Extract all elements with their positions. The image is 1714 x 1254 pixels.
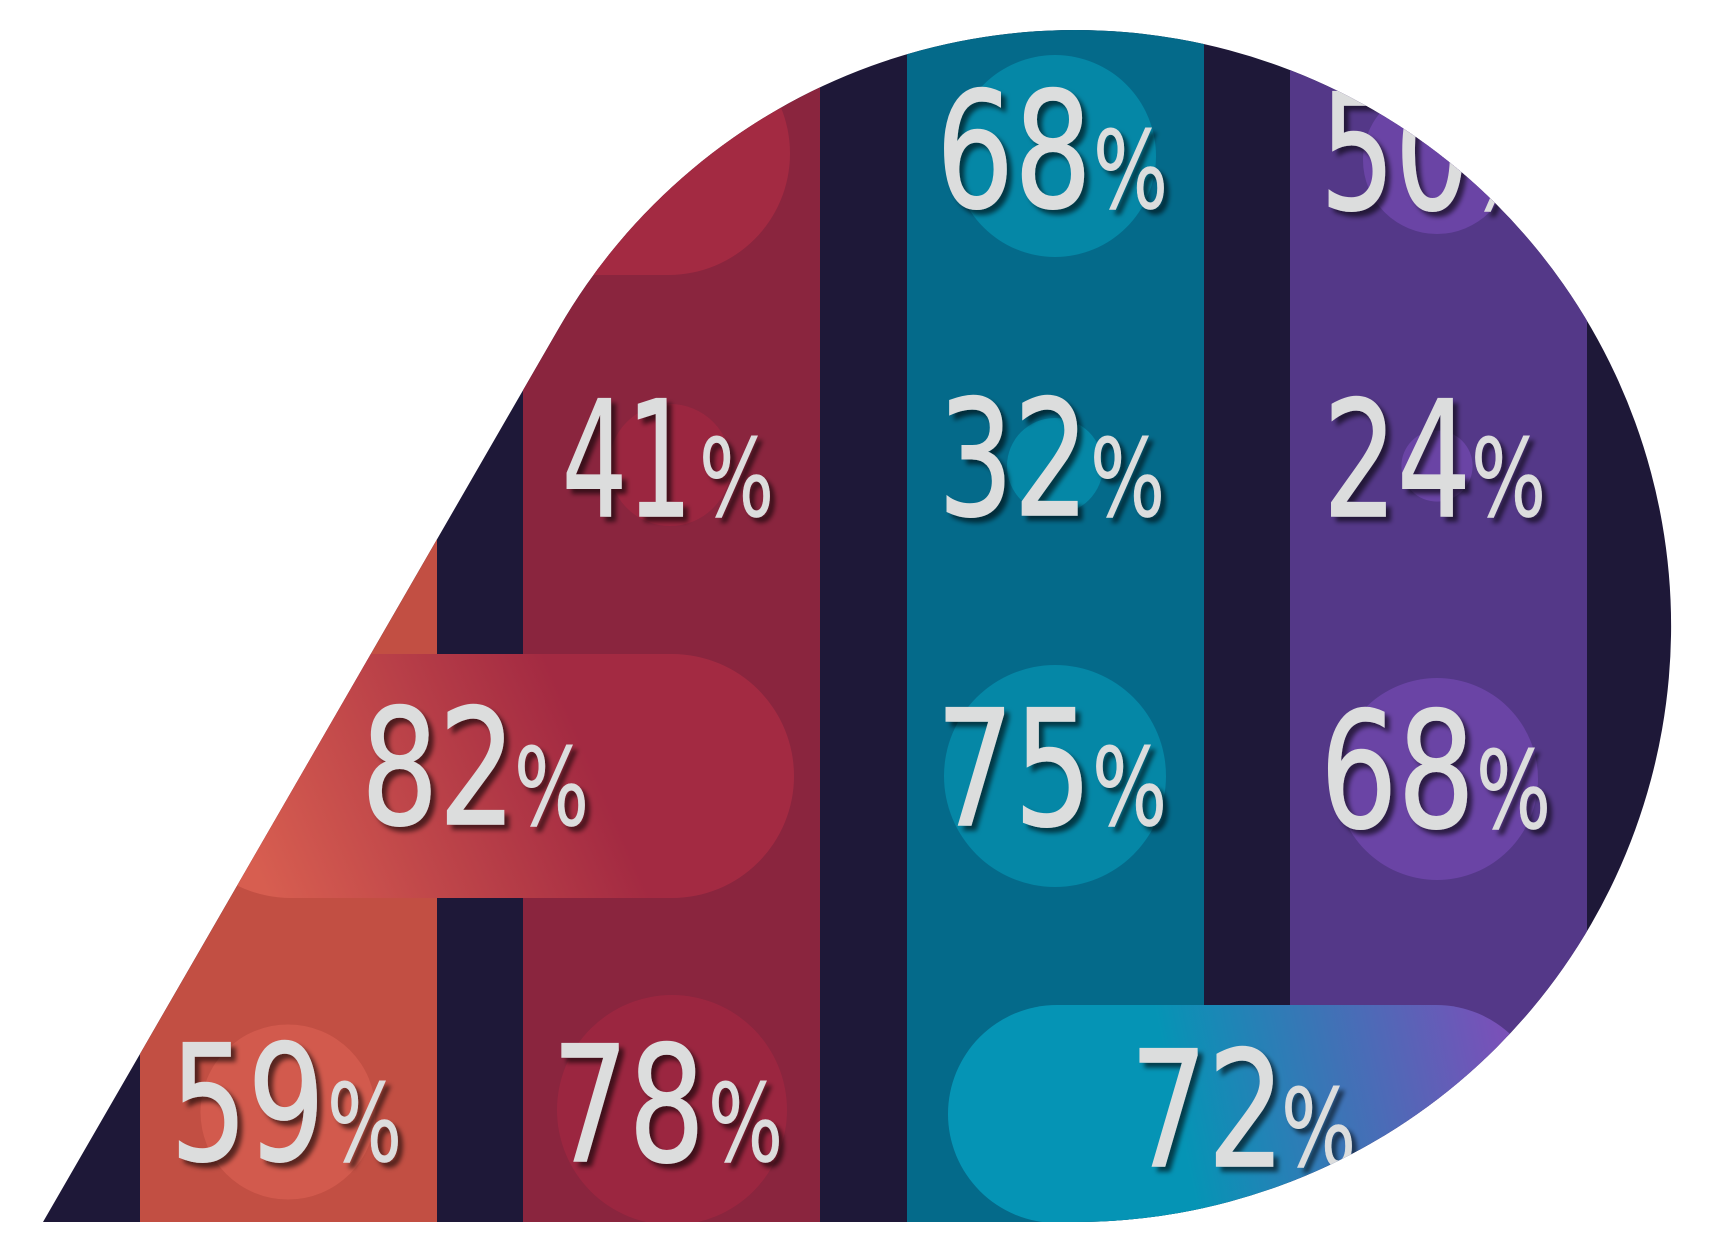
label: 75: 75 [936,676,1092,863]
label: 68 purple: 68 [1320,678,1475,865]
column: purple [1290,70,1587,1182]
label: 24: 24 [1323,367,1471,554]
percent sign: 82%: % [514,726,589,851]
percent sign: 32%: % [1090,417,1165,542]
percent sign: 75%: % [1092,726,1167,851]
label: 32: 32 [938,366,1089,553]
percentage labels [170,58,1551,1204]
label: 82: 82 [361,675,516,862]
column: teal [907,0,1204,1254]
percent sign: 59%: % [327,1062,402,1187]
circle: 75% [944,665,1166,887]
percent sign: 24%: % [1471,417,1546,542]
percent sign: 78%: % [708,1062,783,1187]
circle: 78% [557,995,787,1225]
pill: crimson top [594,108,790,275]
label: 50: 50 [1320,60,1470,247]
pill: 82% [237,654,794,898]
label: 41: 41 [562,367,692,554]
percent sign: 50%: % [1468,111,1543,236]
label: 59: 59 [170,1011,325,1198]
percent sign: 72%: % [1281,1067,1356,1192]
circle: 59% [200,1024,376,1200]
percent sign: 68% teal: % [1093,109,1168,234]
percent sign: 41%: % [699,417,774,542]
column: coral [140,540,437,1222]
circle: 24% [1401,430,1473,502]
label: 72: 72 [1130,1017,1285,1204]
column: crimson [523,0,820,1254]
circle: 41% [609,404,731,526]
circle: 50% [1363,114,1496,234]
pill: 72% [948,1005,1545,1223]
percent sign: 68% purple: % [1476,729,1551,854]
circle: 32% [1007,418,1103,514]
label: 78: 78 [552,1012,705,1199]
label: 68 teal: 68 [936,58,1092,245]
circle: purple 68% [1336,678,1538,880]
circle: teal 68% [954,55,1156,257]
